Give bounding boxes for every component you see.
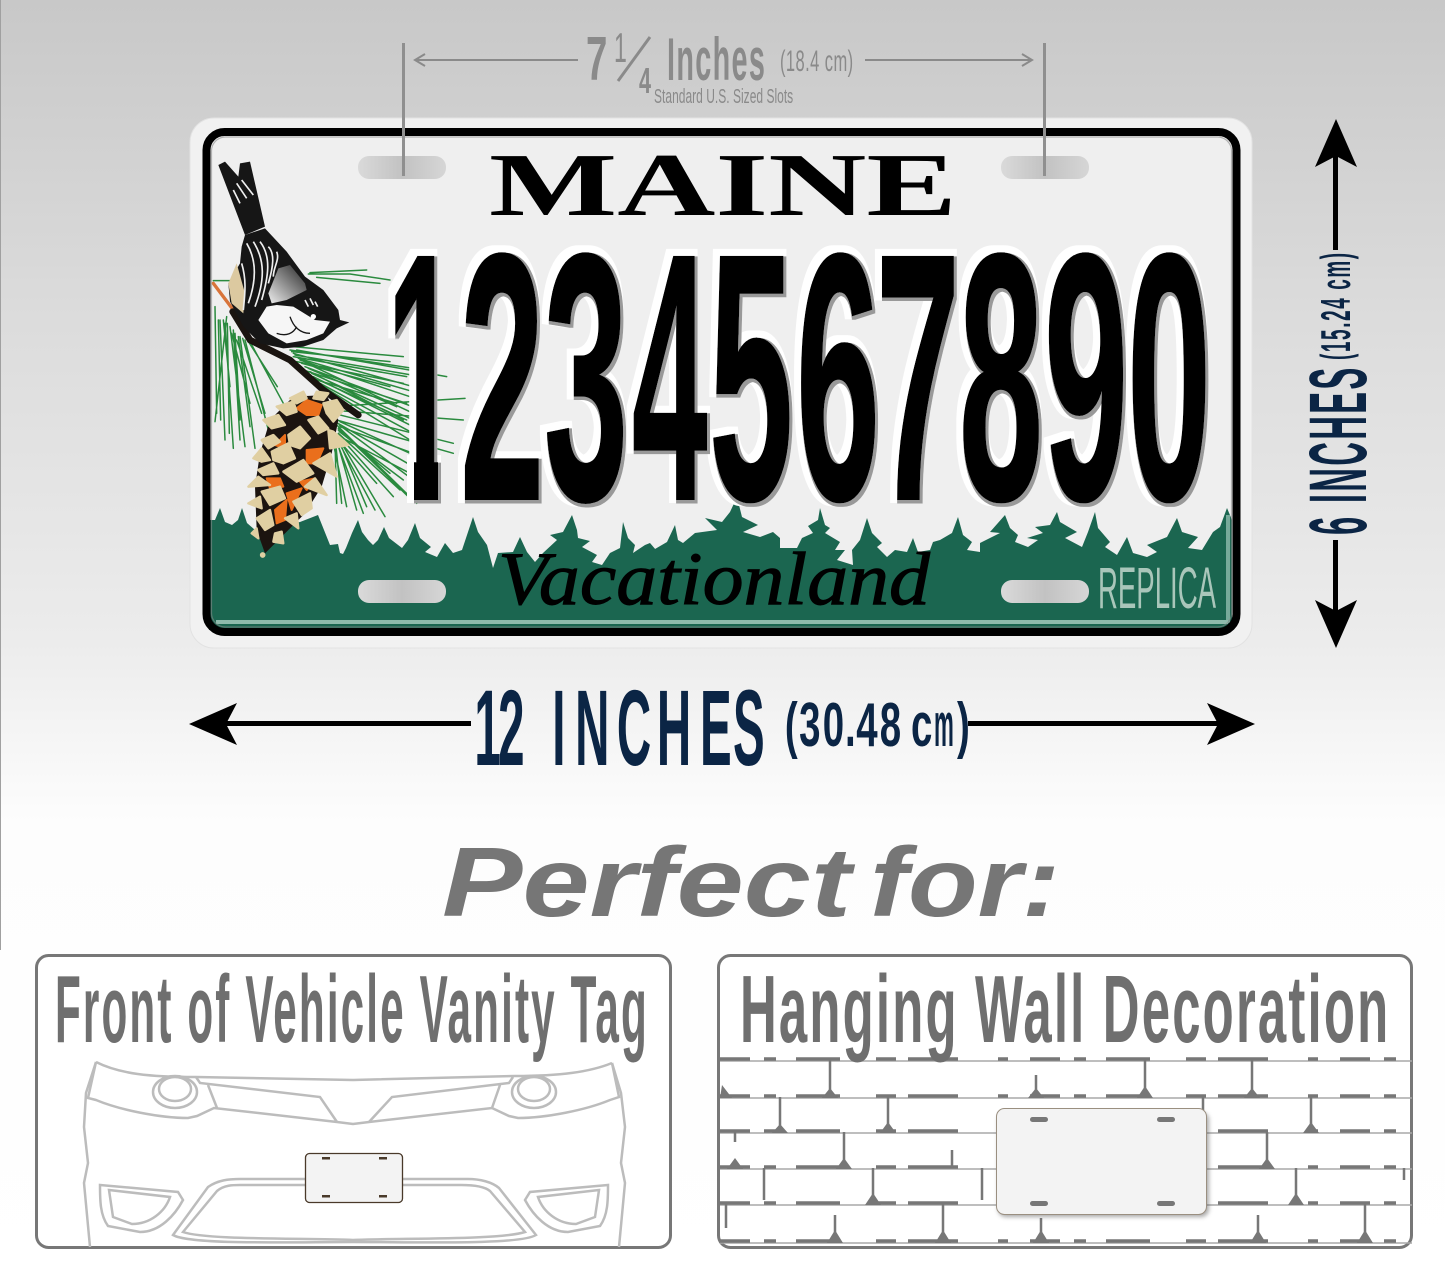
width metric label: c <box>911 690 932 759</box>
heading: perfect for <box>442 827 1060 937</box>
width metric label: ) <box>957 690 970 759</box>
plate face <box>204 130 1238 636</box>
slot spacing dimension <box>402 24 1046 176</box>
panel: front of vehicle <box>36 955 670 1248</box>
spacing label: 1 <box>614 25 627 72</box>
width metric label: (30.48 <box>785 690 901 759</box>
mini plate on car <box>306 1154 402 1202</box>
plate number: 23 <box>460 182 628 574</box>
down arrow <box>1315 540 1357 648</box>
blank plate on wall <box>996 1108 1209 1217</box>
mortar drips <box>720 1085 1373 1243</box>
branch <box>213 283 358 415</box>
slot guide lines <box>402 43 1046 176</box>
brick wall <box>720 1059 1412 1243</box>
green forest band <box>209 497 1232 630</box>
spacing label: (18.4 cm) <box>780 45 853 78</box>
width dimension <box>189 667 1255 788</box>
panel: hanging wall decoration <box>718 956 1412 1248</box>
spacing label <box>586 24 853 108</box>
pine cone <box>248 392 348 557</box>
heading: perfect for: Perfect <box>442 827 855 937</box>
plate number: 4 <box>632 181 708 574</box>
panel frame <box>718 956 1412 1248</box>
heading: perfect for: for: <box>870 827 1060 937</box>
car outline <box>84 1062 625 1247</box>
plate number <box>388 246 1208 508</box>
height label: 6 INCHES <box>1292 368 1384 535</box>
width metric label: m <box>934 690 954 759</box>
license plate <box>190 118 1252 648</box>
state name: MAINE <box>489 136 957 235</box>
green edge highlights <box>216 515 1230 624</box>
height dimension <box>1292 119 1384 648</box>
width label: 12 INCHES <box>474 667 765 788</box>
right arrow <box>968 703 1255 745</box>
chickadee <box>218 162 349 348</box>
panel frame <box>36 956 670 1248</box>
panel heading: Front of Vehicle Vanity Tag <box>55 955 647 1063</box>
mounting slots <box>358 156 1089 603</box>
spacing label: Inches <box>667 25 765 93</box>
plate number: 567890 <box>709 182 1211 574</box>
up arrow <box>1315 119 1357 250</box>
width metric label <box>785 690 970 759</box>
panel heading: Hanging Wall Decoration <box>740 956 1388 1063</box>
left arrow <box>189 703 471 745</box>
black frame <box>206 132 1236 632</box>
height metric label: (15.24 cm) <box>1313 253 1359 360</box>
plate body <box>190 118 1252 648</box>
spacing label: 4 <box>639 61 651 101</box>
state slogan: Vacationland <box>498 538 931 621</box>
right arrow <box>865 54 1032 66</box>
left arrow <box>415 54 578 66</box>
license plate: REPLICA <box>1098 556 1216 621</box>
spacing label: Standard U.S. Sized Slots <box>654 86 793 108</box>
plate number: 1 <box>387 182 457 575</box>
spacing label: 7 <box>586 24 607 93</box>
pine needles <box>213 270 465 517</box>
